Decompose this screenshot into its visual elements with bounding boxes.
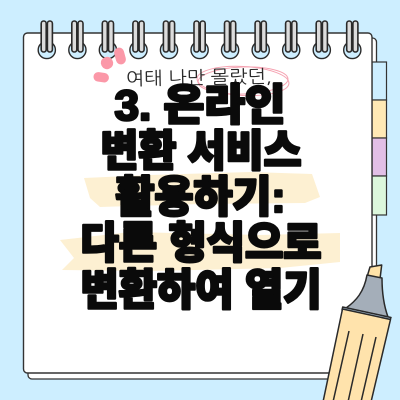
- title: 3. 온라인: [114, 82, 286, 130]
- marker stripes: [333, 331, 376, 400]
- marker cap: [346, 275, 388, 317]
- marker tip: [367, 265, 382, 279]
- panel: index tabs: [372, 62, 386, 215]
- title: 활용하기:: [116, 174, 286, 222]
- brush highlight: line 3: [84, 172, 320, 207]
- panel: back page: [28, 38, 376, 379]
- brush highlight: line 4: [60, 232, 340, 271]
- spiral binding: [38, 21, 361, 59]
- marker collar: [342, 307, 391, 320]
- icon: pink accent marks: [93, 46, 127, 83]
- pink ellipse around handwriting: [196, 64, 290, 98]
- title: [80, 82, 322, 315]
- title: 다른 형식으로: [80, 220, 322, 268]
- handwritten subtitle: 여태 나만 몰랐던,: [126, 67, 272, 88]
- icon: highlighter marker: [323, 265, 391, 400]
- panel: front page: [24, 33, 372, 373]
- title: 변환 서비스: [100, 128, 302, 176]
- marker body: [323, 309, 390, 400]
- title: 변환하여 열기: [80, 267, 322, 315]
